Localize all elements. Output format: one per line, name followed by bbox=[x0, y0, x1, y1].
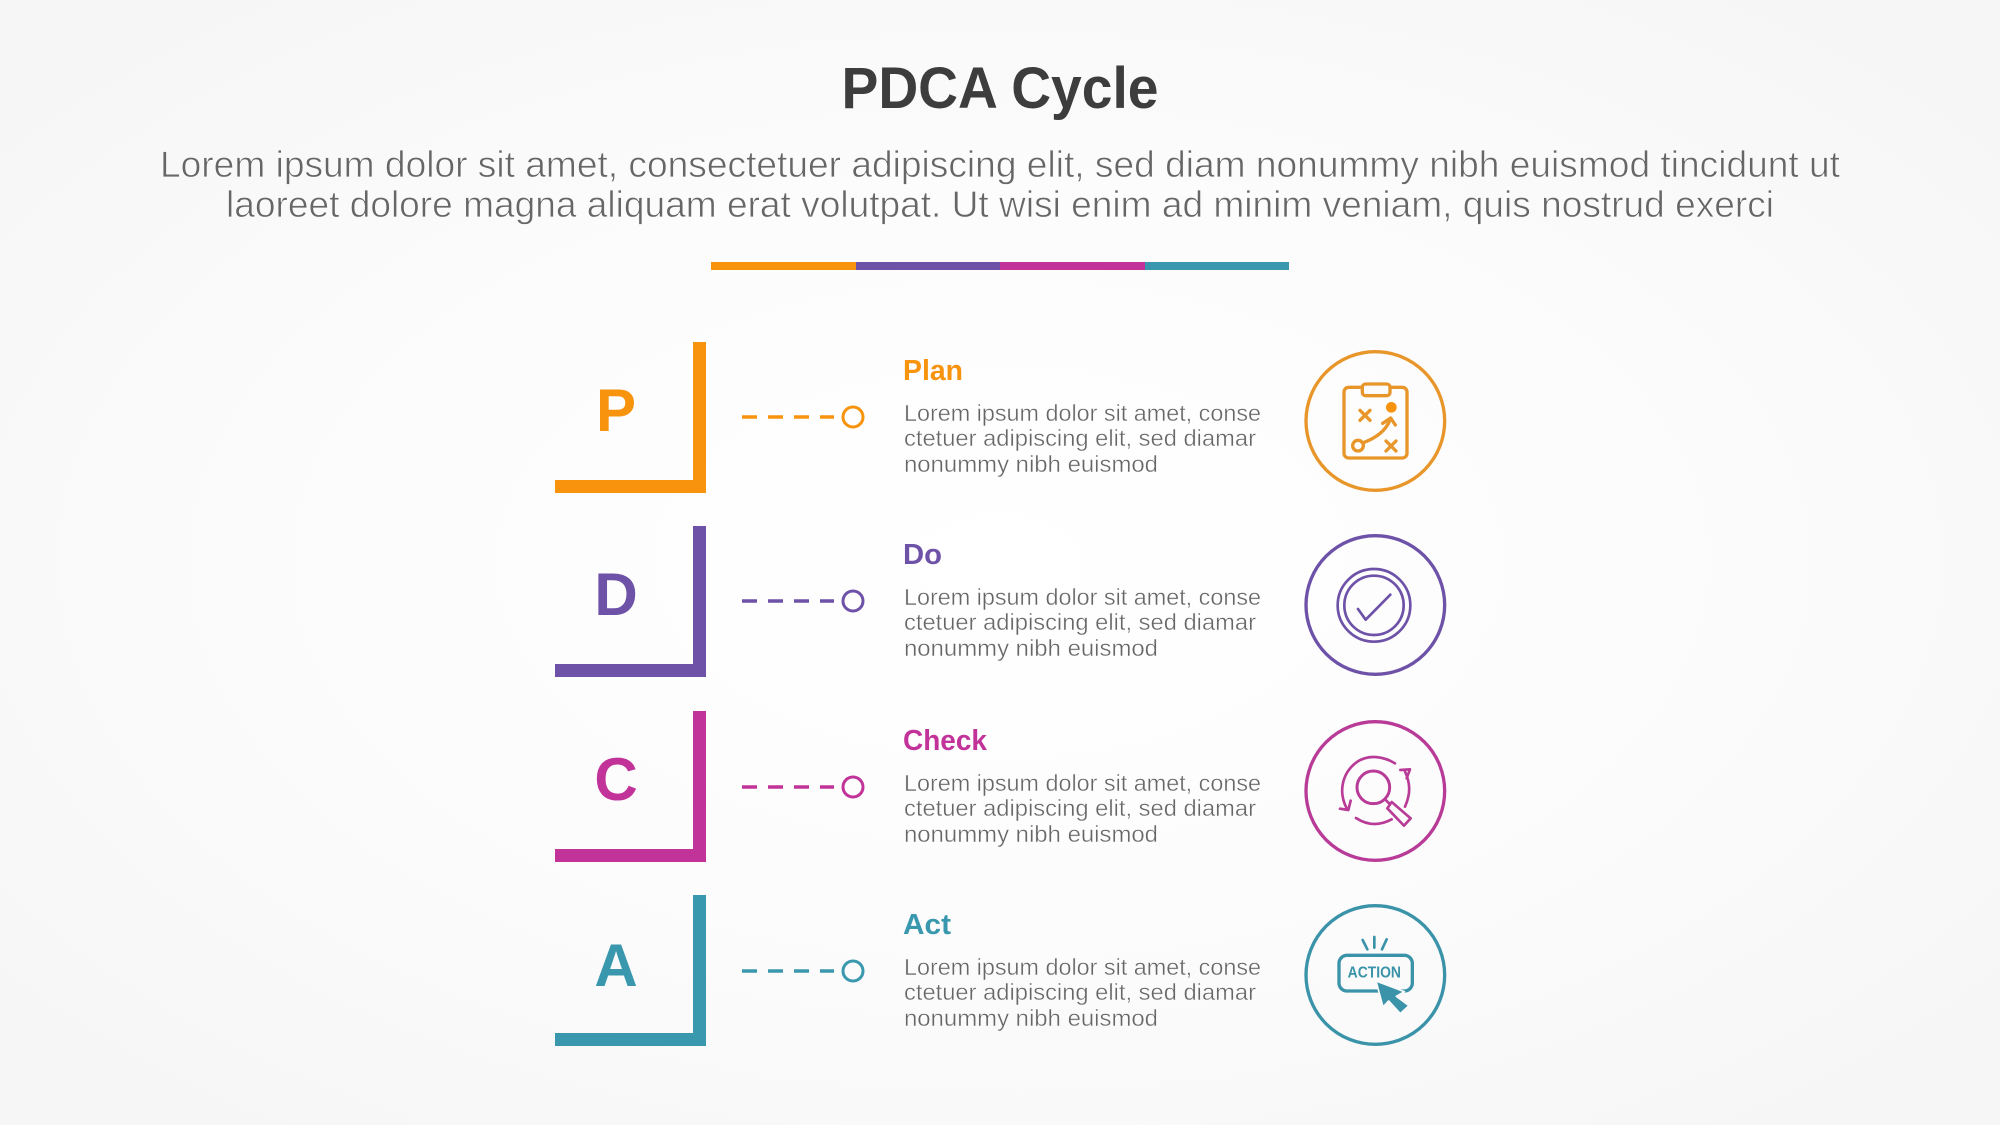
title: PDCA Cycle bbox=[842, 56, 1158, 121]
dashed connector: plan bbox=[742, 407, 863, 427]
text block: check: ctetuer adipiscing elit, sed diamar bbox=[904, 795, 1256, 821]
dashed connector: do bbox=[742, 591, 863, 611]
text block: plan bbox=[904, 400, 1261, 477]
icon: action button with cursor: ACTION bbox=[1348, 965, 1401, 982]
text block: act: nonummy nibh euismod bbox=[904, 1005, 1158, 1031]
text block: check bbox=[904, 770, 1261, 847]
heading: Do: Do bbox=[903, 539, 942, 571]
panel: do row bbox=[555, 526, 1445, 677]
bracket: check bbox=[555, 711, 706, 862]
subtitle text block bbox=[160, 144, 1841, 225]
text block: do: Lorem ipsum dolor sit amet, conse bbox=[904, 584, 1261, 610]
text block: act: Lorem ipsum dolor sit amet, conse bbox=[904, 954, 1261, 980]
icon: magnifier with cycle arrows bbox=[1306, 722, 1445, 860]
text block: plan: nonummy nibh euismod bbox=[904, 451, 1158, 477]
panel: check row bbox=[555, 711, 1445, 862]
text block: do: nonummy nibh euismod bbox=[904, 635, 1158, 661]
letter P: P bbox=[596, 377, 636, 444]
heading: Act: Act bbox=[903, 909, 951, 941]
dashed connector: check bbox=[742, 777, 863, 797]
text block: do bbox=[904, 584, 1261, 661]
subtitle text block: Lorem ipsum dolor sit amet, consectetuer adipiscing elit, sed diam nonummy nibh euismod tincidunt ut bbox=[160, 144, 1841, 185]
bracket: plan bbox=[555, 342, 706, 493]
text block: do: ctetuer adipiscing elit, sed diamar bbox=[904, 609, 1256, 635]
text block: check: nonummy nibh euismod bbox=[904, 821, 1158, 847]
subtitle text block: laoreet dolore magna aliquam erat volutpat. Ut wisi enim ad minim veniam, quis nostrud exerci bbox=[226, 184, 1774, 225]
letter A: A bbox=[594, 932, 638, 999]
icon: action button with cursor bbox=[1306, 906, 1445, 1044]
text block: plan: Lorem ipsum dolor sit amet, conse bbox=[904, 400, 1261, 426]
panel: plan row bbox=[555, 342, 1445, 493]
panel: act row bbox=[555, 895, 1445, 1046]
four-colour divider bar bbox=[711, 262, 1289, 270]
bracket: act bbox=[555, 895, 706, 1046]
text block: act: ctetuer adipiscing elit, sed diamar bbox=[904, 979, 1256, 1005]
dashed connector: act bbox=[742, 961, 863, 981]
bracket: do bbox=[555, 526, 706, 677]
heading: Check: Check bbox=[903, 725, 988, 757]
heading: Plan: Plan bbox=[903, 355, 963, 387]
text block: check: Lorem ipsum dolor sit amet, conse bbox=[904, 770, 1261, 796]
icon: check badge bbox=[1306, 536, 1445, 674]
text block: plan: ctetuer adipiscing elit, sed diamar bbox=[904, 425, 1256, 451]
text block: act bbox=[904, 954, 1261, 1031]
letter C: C bbox=[594, 746, 638, 813]
letter D: D bbox=[594, 561, 638, 628]
icon: clipboard strategy bbox=[1306, 352, 1445, 490]
